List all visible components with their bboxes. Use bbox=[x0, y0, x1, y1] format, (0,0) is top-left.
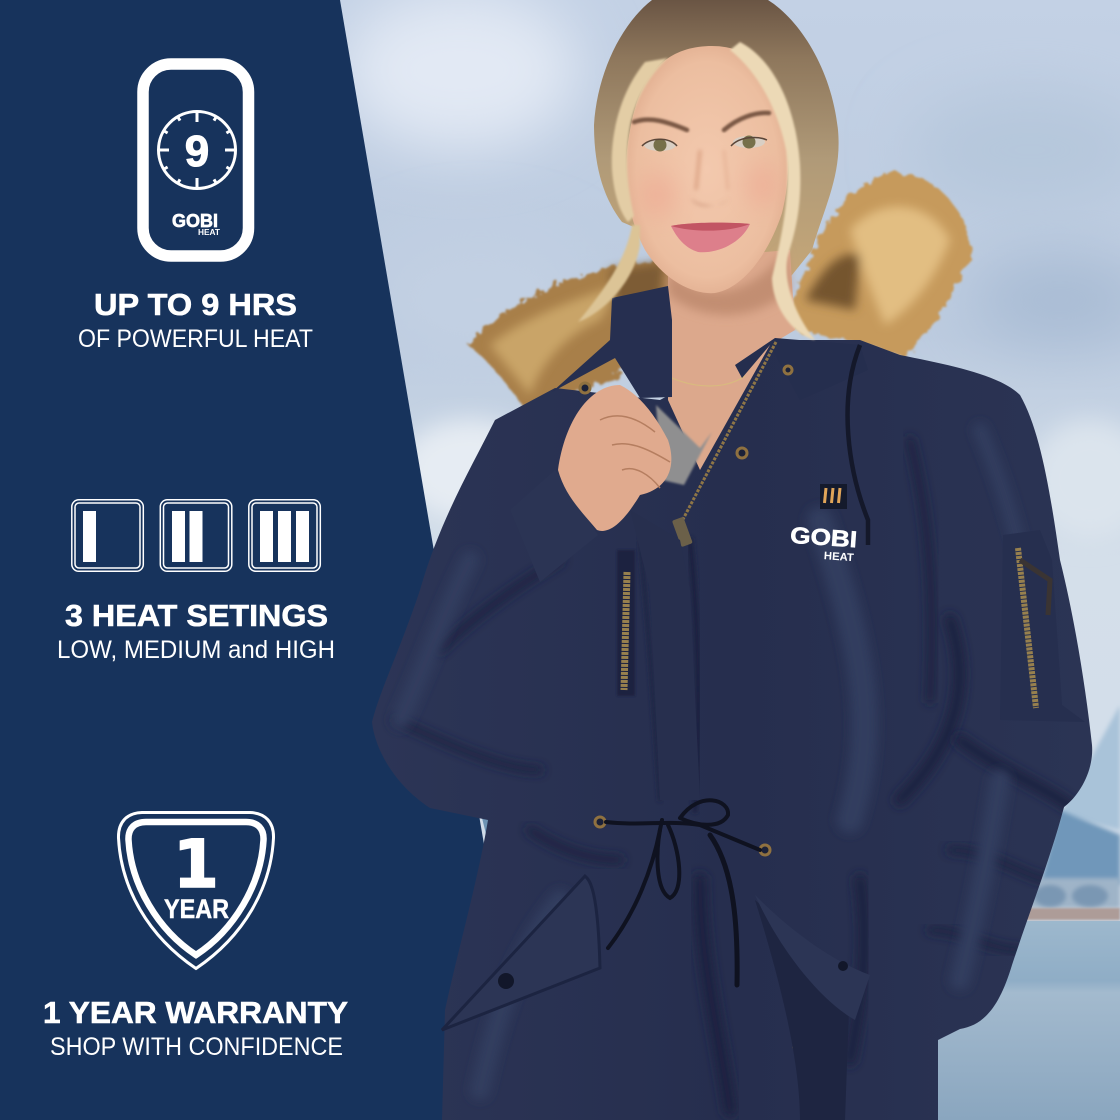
finger lines bbox=[600, 416, 670, 488]
neck shadow under chin bbox=[668, 250, 790, 315]
jacket stand collar left bbox=[552, 286, 672, 398]
background: sky and lake photo bbox=[330, 0, 1120, 1120]
jacket logo bbox=[789, 522, 858, 564]
mountains bbox=[1060, 705, 1120, 830]
icon: battery with clock showing 9: 9 bbox=[185, 127, 209, 176]
waist drawcord bbox=[606, 800, 760, 985]
icon: medium setting bbox=[160, 500, 232, 571]
zipper pull bbox=[672, 517, 693, 547]
main zipper bbox=[680, 342, 776, 525]
heading: 1 year warranty: 1 YEAR WARRANTY bbox=[43, 995, 348, 1030]
heading: 3 heat setings: 3 HEAT SETINGS bbox=[65, 598, 328, 633]
panel text and icons: warranty bbox=[43, 812, 348, 1061]
fur highlights bbox=[490, 207, 950, 395]
icon: high setting bbox=[249, 500, 320, 571]
nose bbox=[690, 150, 730, 206]
grey undershirt bbox=[656, 405, 712, 485]
jacket logo: GOBI bbox=[789, 522, 858, 552]
button placket bbox=[630, 510, 700, 800]
icon: battery with clock showing 9: HEAT bbox=[198, 228, 220, 237]
icon: one year shield: YEAR bbox=[164, 894, 229, 924]
hair left strand bbox=[578, 58, 668, 322]
icon: low setting bbox=[72, 500, 143, 571]
icon: one year shield bbox=[118, 812, 274, 968]
neck and chest bbox=[668, 250, 795, 470]
face bbox=[626, 46, 788, 293]
hair back bbox=[594, 0, 839, 290]
photo: woman in navy parka bbox=[372, 0, 1092, 1120]
jacket logo: HEAT bbox=[823, 550, 854, 564]
jacket stand collar right bbox=[735, 338, 868, 400]
subheading: shop with confidence: SHOP WITH CONFIDENCE bbox=[50, 1033, 343, 1061]
hand holding collar bbox=[558, 385, 671, 531]
panel text and icons: 9 hour runtime bbox=[78, 64, 313, 353]
jacket highlights bbox=[400, 430, 1040, 1090]
sleeve zipper pocket bbox=[1000, 530, 1085, 722]
jacket snaps bbox=[580, 366, 806, 1052]
icon: battery with clock showing 9: GOBI bbox=[172, 210, 218, 231]
subheading: of powerful heat: OF POWERFUL HEAT bbox=[78, 325, 313, 353]
brows bbox=[634, 113, 769, 130]
icon: battery with clock showing 9 bbox=[143, 64, 248, 256]
jacket body bbox=[372, 340, 1092, 1120]
heat button bbox=[820, 484, 847, 509]
lower pocket flap bbox=[442, 876, 600, 1030]
drawcord hood bbox=[848, 345, 868, 545]
jacket shading folds bbox=[395, 440, 1075, 1110]
necklace bbox=[672, 376, 745, 386]
heading: up to 9 hrs: UP TO 9 HRS bbox=[94, 287, 297, 322]
eyes bbox=[642, 136, 767, 152]
sleeve cuff bbox=[510, 470, 598, 582]
lips bbox=[671, 223, 750, 252]
cheek blush bbox=[640, 163, 778, 217]
chest pocket zipper bbox=[617, 550, 635, 696]
hair right strand bbox=[730, 42, 815, 340]
icon: one year shield: 1 bbox=[173, 826, 219, 903]
left navy panel bbox=[0, 0, 531, 1120]
right pocket opening and hand bbox=[755, 895, 870, 1120]
fur hood trim back bbox=[468, 173, 972, 415]
panel text and icons: heat settings bbox=[57, 500, 335, 664]
subheading: low medium high: LOW, MEDIUM and HIGH bbox=[57, 636, 335, 664]
